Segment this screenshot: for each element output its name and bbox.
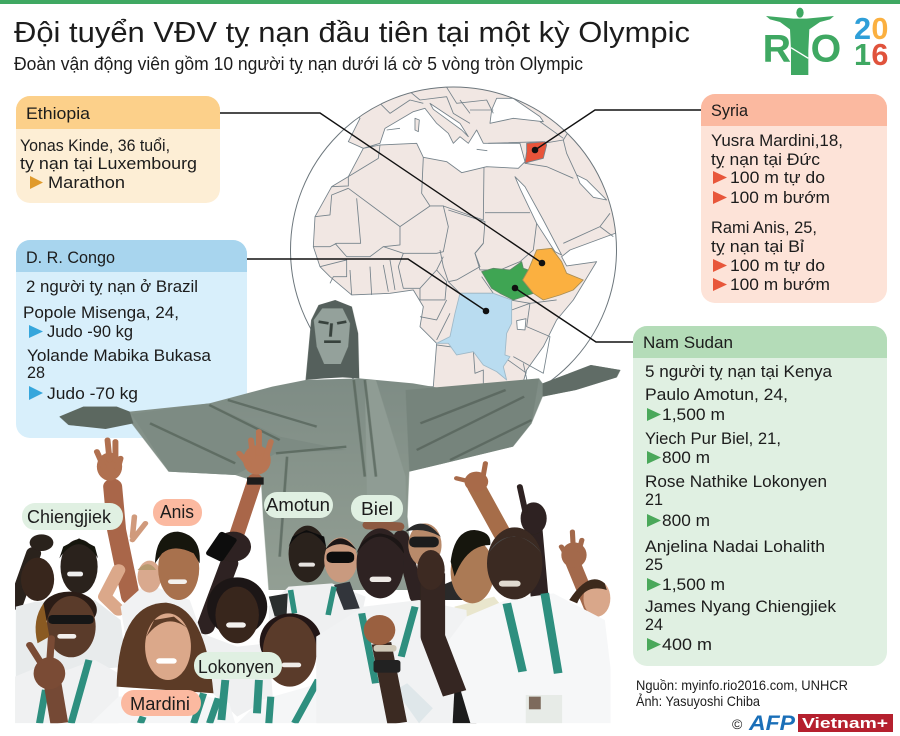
- source text: Ảnh: Yasuyoshi Chiba: [636, 693, 760, 709]
- panel: Ethiopia: Yonas Kinde, 36 tuổi,: [20, 136, 170, 155]
- icon: AFP Vietnam+ logo: [732, 712, 893, 735]
- panel: Nam Sudan: 25: [645, 555, 663, 574]
- panel: Nam Sudan: 800 m: [662, 448, 710, 467]
- arrow: Syria leader: [532, 110, 701, 153]
- panel: Nam Sudan: Paulo Amotun, 24,: [645, 385, 788, 404]
- panel: Syria: 100 m bướm: [730, 188, 830, 207]
- panel: D. R. Congo: Judo -90 kg: [47, 322, 133, 341]
- panel: D. R. Congo: Yolande Mabika Bukasa: [27, 346, 212, 365]
- label: Amotun: [264, 492, 333, 518]
- photo: refugee Olympic team: [15, 432, 611, 723]
- panel: D. R. Congo: 2 người tỵ nạn ở Brazil: [26, 277, 198, 296]
- label: Mardini: [121, 690, 201, 716]
- subtitle: Đoàn vận động viên gồm 10 người tỵ nạn dưới lá cờ 5 vòng tròn Olympic: [14, 54, 583, 74]
- label: Biel: Biel: [361, 499, 393, 519]
- source text: [636, 677, 848, 709]
- label: Mardini: Mardini: [130, 694, 190, 714]
- icon: Rio 2016 logo: R: [763, 27, 791, 71]
- panel: Nam Sudan: Anjelina Nadai Lohalith: [645, 537, 825, 556]
- label: Amotun: Amotun: [266, 495, 330, 515]
- panel: Nam Sudan: 800 m: [662, 511, 710, 530]
- panel: Nam Sudan: 1,500 m: [662, 575, 725, 594]
- panel: Ethiopia: Ethiopia: [26, 104, 91, 123]
- label: Chiengjiek: [22, 503, 123, 530]
- arrow: Ethiopia leader: [220, 113, 545, 266]
- icon: Rio 2016 logo: 0: [871, 12, 888, 46]
- statue: Christ the Redeemer: [59, 300, 620, 590]
- panel: D. R. Congo: Judo -70 kg: [47, 384, 138, 403]
- source text: Nguồn: myinfo.rio2016.com, UNHCR: [636, 677, 848, 693]
- panel: Syria: Syria: [711, 101, 749, 120]
- panel: Ethiopia: tỵ nạn tại Luxembourg: [20, 154, 197, 173]
- icon: Rio 2016 logo: 2: [854, 12, 871, 46]
- icon: Rio 2016 logo: 6: [871, 38, 888, 72]
- panel: Syria: tỵ nạn tại Đức: [711, 150, 821, 169]
- panel: Syria: [701, 94, 887, 303]
- panel: Syria: Yusra Mardini,18,: [711, 131, 843, 150]
- panel: Ethiopia: Marathon: [48, 173, 125, 192]
- icon: AFP Vietnam+ logo: ©: [732, 716, 743, 732]
- label: Lokonyen: [194, 652, 282, 679]
- label: Lokonyen: Lokonyen: [198, 657, 274, 677]
- panel: Syria: 100 m bướm: [730, 275, 830, 294]
- panel: Nam Sudan: Rose Nathike Lokonyen: [645, 472, 827, 491]
- icon: AFP Vietnam+ logo: AFP: [748, 712, 796, 735]
- panel: Nam Sudan: Yiech Pur Biel, 21,: [645, 429, 781, 448]
- icon: AFP Vietnam+ logo: Vietnam+: [802, 715, 888, 732]
- panel: Syria: 100 m tự do: [730, 256, 825, 275]
- panel: Nam Sudan: Nam Sudan: [643, 333, 733, 352]
- panel: D. R. Congo: D. R. Congo: [26, 248, 115, 267]
- arrow: D. R. Congo leader: [247, 259, 489, 314]
- panel: D. R. Congo: 28: [27, 363, 45, 382]
- label: Biel: [351, 495, 403, 522]
- panel: Nam Sudan: 400 m: [662, 635, 712, 654]
- panel: Nam Sudan: 24: [645, 615, 663, 634]
- arrow: Nam Sudan leader: [512, 285, 633, 342]
- panel: Syria: 100 m tự do: [730, 168, 825, 187]
- label: Anis: Anis: [160, 502, 194, 522]
- icon: Rio 2016 logo: 1: [854, 38, 871, 72]
- icon: Rio 2016 logo: O: [811, 27, 841, 71]
- panel: Syria: tỵ nạn tại Bỉ: [711, 237, 804, 256]
- panel: Nam Sudan: [633, 326, 887, 666]
- panel: Nam Sudan: 21: [645, 490, 663, 509]
- panel: D. R. Congo: [16, 240, 247, 438]
- panel: Nam Sudan: 1,500 m: [662, 405, 725, 424]
- panel: Syria: Rami Anis, 25,: [711, 218, 817, 237]
- map: Africa globe: [290, 86, 617, 388]
- label: Anis: [153, 499, 202, 526]
- panel: Nam Sudan: 5 người tỵ nạn tại Kenya: [645, 362, 833, 381]
- panel: D. R. Congo: Popole Misenga, 24,: [23, 303, 179, 322]
- title: Đội tuyển VĐV tỵ nạn đầu tiên tại một kỳ Olympic: [14, 17, 690, 49]
- icon: Rio 2016 logo: [763, 8, 888, 75]
- panel: Nam Sudan: James Nyang Chiengjiek: [645, 597, 836, 616]
- panel: Ethiopia: [16, 96, 220, 203]
- label: Chiengjiek: Chiengjiek: [27, 507, 112, 527]
